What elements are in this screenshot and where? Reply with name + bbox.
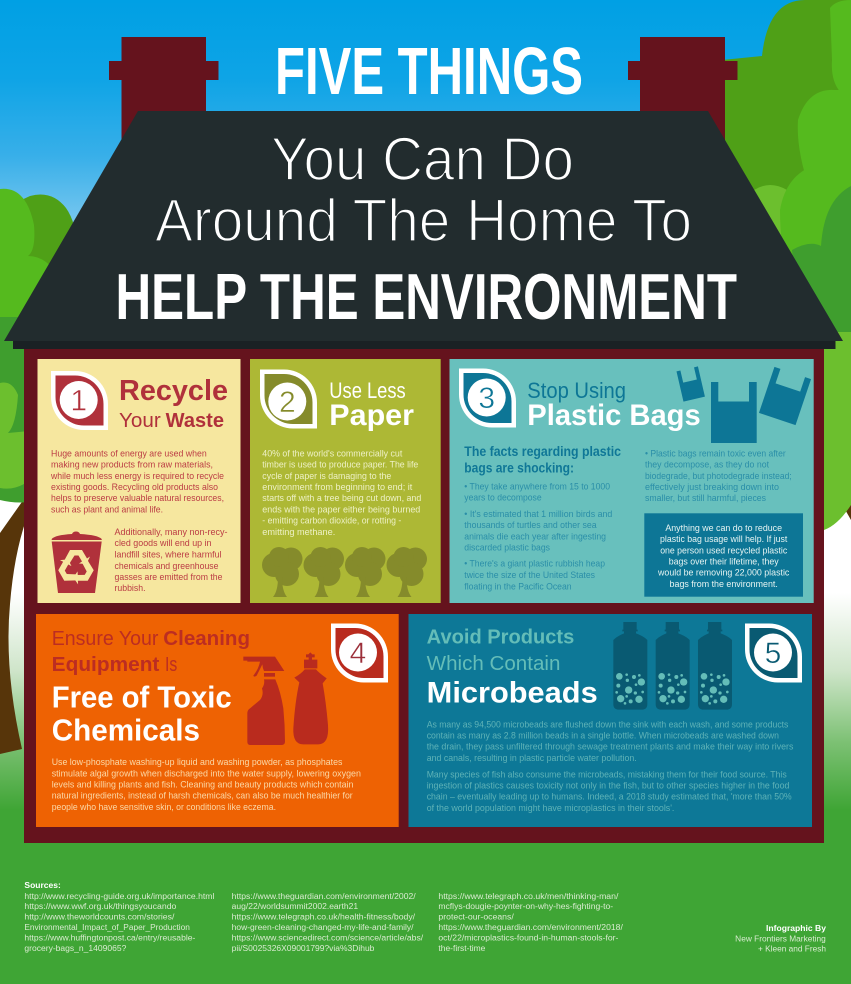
callout: reduce plastic bag usage: would be removing 22,000 plastic [657, 568, 790, 579]
heading: use less paper: Use Less [329, 378, 406, 403]
sources column 2: https://www.telegraph.co.uk/health-fitness/body/ [232, 912, 416, 922]
callout: reduce plastic bag usage: one person used recycled plastic [660, 545, 787, 556]
heading: avoid products which contain microbeads: Which Contain [427, 653, 560, 675]
sources column 2: aug/22/worldsummit2002.earth21 [232, 902, 358, 911]
heading: recycle your waste: Your [119, 410, 161, 432]
text: cleaning body: people who have sensitive skin, or conditions like eczema. [52, 802, 276, 813]
icon: badge 1: 1 [70, 384, 87, 418]
heading: avoid products which contain microbeads [427, 626, 598, 710]
callout: reduce plastic bag usage [644, 513, 803, 597]
text: recycle intro: making new products from raw materials, [51, 460, 213, 470]
text: paper body: timber is used to produce paper. The life [262, 460, 418, 470]
background: lawn fading to green [0, 260, 851, 984]
icon: spray bottle and detergent bottle [243, 652, 328, 745]
icon: badge 2 [260, 370, 317, 428]
sources column 2: pii/S0025326X09001799?via%3Dihub [232, 944, 375, 953]
title: You Can Do [271, 125, 574, 193]
sources column 3: the-first-time [438, 944, 485, 953]
text: facts left column: years to decompose [464, 492, 542, 504]
text: cleaning body: Use low-phosphate washing-up liquid and washing powder, as phosphates [52, 757, 343, 768]
heading: avoid products which contain microbeads: Avoid Products [427, 626, 574, 648]
panel 2: paper [250, 359, 441, 603]
text: landfill note: chemicals and greenhouse [114, 561, 218, 572]
icon: plastic bags [676, 366, 811, 443]
text: landfill note: rubbish. [114, 583, 146, 594]
text: paper body: starts off with a tree being cut down, and [262, 493, 421, 504]
text: recycle intro: such as plant and animal life. [51, 504, 163, 516]
text: cleaning body: stimulate algal growth when discharged into the water supply, lowering oxygen [52, 768, 361, 779]
text: microbeads body: chain – eventually leading up to humans. Indeed, a 2018 study estimated that, 'more than 50% [427, 792, 792, 803]
sources column 1: https://www.huffingtonpost.ca/entry/reusable- [24, 934, 196, 942]
heading: use less paper [329, 378, 414, 432]
text: cleaning body: levels and killing plants and fish. Cleaning and beauty products which contain [52, 779, 353, 790]
text: landfill note: gasses are emitted from the [114, 572, 222, 583]
text: facts right column: biodegrade, but photodegrade instead; [645, 471, 792, 482]
text: paper body: cycle of paper is damaging to the [262, 471, 391, 482]
sources column 1: grocery-bags_n_1409065? [24, 944, 127, 953]
heading: recycle your waste [119, 375, 228, 432]
background: sky [0, 0, 851, 260]
credit: infographic by: Infographic By [766, 923, 826, 933]
panel 1: recycle [38, 359, 240, 603]
text: cleaning body: natural ingredients, instead of harsh chemicals, can also be much healthier for [52, 791, 353, 802]
heading: avoid products which contain microbeads: Microbeads [427, 677, 598, 710]
text: landfill note: cled goods will end up in [114, 538, 212, 549]
text: cleaning body [52, 757, 361, 813]
sources column 1: http://www.recycling-guide.org.uk/importance.html [24, 892, 215, 901]
sources column 3 [438, 892, 624, 953]
text: facts right column: • Plastic bags remain toxic even after [645, 448, 786, 460]
text: paper body: environment from beginning to end; it [262, 482, 413, 493]
heading: use less paper: Paper [329, 399, 414, 432]
callout: reduce plastic bag usage: Anything we can do to reduce [665, 523, 782, 534]
heading: stop using plastic bags: Stop Using [527, 378, 626, 403]
left tree [0, 189, 78, 754]
icon: recycling bin [52, 532, 102, 593]
icon: badge 3: 3 [478, 382, 495, 415]
left chimney [109, 37, 218, 147]
sources column 3: mcflys-dougie-poynter-on-why-hes-fighting-to- [438, 902, 614, 911]
roof [4, 111, 843, 349]
icon: badge 5: 5 [765, 637, 781, 670]
icon: badge 3 [459, 368, 516, 428]
callout: reduce plastic bag usage: bags over their lifetime, they [669, 557, 779, 568]
text: recycle intro: existing goods. Recycling old products also [51, 482, 218, 493]
heading: ensure your cleaning equipment is free of toxic chemicals: Ensure Your [52, 627, 159, 650]
text: landfill note: Additionally, many non-recy- [114, 527, 228, 538]
sources [24, 880, 624, 953]
text: facts heading [464, 443, 621, 476]
text: microbeads body: ingestion of plastics causes toxicity not only in the fish, but to other species higher in the food [427, 781, 789, 792]
icon: four trees [262, 547, 427, 597]
text: facts left column: thousands of turtles and other sea [464, 520, 597, 531]
text: paper body: - emitting carbon dioxide, or rotting - [262, 516, 401, 526]
text: facts left column: • They take anywhere from 15 to 1000 [464, 482, 610, 492]
credit: infographic by [735, 923, 826, 954]
heading: ensure your cleaning equipment is free of toxic chemicals: Equipment [52, 653, 160, 676]
right tree [722, 0, 851, 530]
sources column 2 [232, 892, 424, 953]
heading: stop using plastic bags [527, 378, 701, 432]
icon: badge 1 [51, 371, 108, 430]
heading: ensure your cleaning equipment is free of toxic chemicals: Free of Toxic [52, 680, 232, 715]
text: facts left column: discarded plastic bags [464, 543, 550, 554]
text: microbeads body: Many species of fish also consume the microbeads, mistaking them for their food source. This [427, 769, 787, 780]
text: facts left column [464, 482, 612, 592]
icon: badge 4: 4 [350, 637, 366, 670]
text: microbeads body: and canals, resulting in plastic particle water pollution. [427, 753, 637, 764]
text: facts right column: they decompose, as they do not [645, 460, 769, 470]
panel 4: cleaning chemicals [36, 614, 399, 827]
text: facts left column: twice the size of the United States [464, 570, 595, 581]
sources: Sources: [24, 880, 61, 890]
text: microbeads body: contain as many as 2.8 million beads in a single bottle. When microbeads are washed down [427, 730, 779, 741]
icon: bottles with microbeads [613, 622, 732, 710]
sources column 2: how-green-cleaning-changed-my-life-and-family/ [232, 923, 414, 932]
panel 5: microbeads [408, 614, 812, 827]
house wall [24, 345, 824, 843]
sources column 2: https://www.sciencedirect.com/science/article/abs/ [232, 934, 424, 942]
sources column 1: Environmental_Impact_of_Paper_Production [24, 923, 190, 932]
heading: ensure your cleaning equipment is free of toxic chemicals: Cleaning [163, 627, 250, 650]
text: facts left column: animals die each year after ingesting [464, 531, 606, 542]
text: landfill note: landfill sites, where harmful [114, 550, 222, 560]
text: paper body: 40% of the world's commercially cut [262, 448, 403, 460]
sources column 2: https://www.theguardian.com/environment/2002/ [232, 892, 417, 901]
text: landfill note [114, 527, 228, 594]
panel 3: plastic bags [450, 359, 814, 603]
credit: infographic by: + Kleen and Fresh [758, 945, 826, 954]
text: facts heading: The facts regarding plastic [464, 443, 621, 459]
text: microbeads body: As many as 94,500 microbeads are flushed down the sink with each wash, and some products [427, 719, 789, 730]
text: recycle intro: while much less energy is required to recycle [50, 471, 224, 482]
text: microbeads body: of the world population might have microplastics in their stools'. [427, 803, 674, 814]
sources column 1 [24, 892, 215, 953]
text: facts heading: bags are shocking: [464, 460, 574, 476]
icon: badge 2: 2 [279, 386, 296, 419]
heading: stop using plastic bags: Plastic Bags [527, 399, 701, 432]
text: recycle intro: helps to preserve valuable natural resources, [51, 493, 224, 504]
text: facts right column: smaller, but still harmful, pieces [645, 493, 766, 504]
right chimney [628, 37, 738, 147]
sources column 1: https://www.wwf.org.uk/thingsyoucando [24, 902, 177, 911]
text: facts left column: • It's estimated that 1 million birds and [464, 509, 612, 520]
heading: recycle your waste: Waste [166, 410, 224, 432]
sources column 3: https://www.theguardian.com/environment/2018/ [438, 923, 624, 932]
text: recycle intro: Huge amounts of energy are used when [51, 448, 207, 460]
text: facts left column: • There's a giant plastic rubbish heap [464, 559, 605, 570]
heading: recycle your waste: Recycle [119, 375, 228, 407]
heading: ensure your cleaning equipment is free of toxic chemicals: Chemicals [52, 713, 200, 748]
sources column 1: http://www.theworldcounts.com/stories/ [24, 912, 175, 922]
heading: ensure your cleaning equipment is free of toxic chemicals: Is [165, 653, 177, 676]
text: paper body [262, 448, 421, 538]
sources column 3: https://www.telegraph.co.uk/men/thinking-man/ [438, 892, 619, 901]
text: microbeads body [427, 719, 794, 814]
text: paper body: ends with the paper either being burned [262, 504, 420, 516]
text: facts right column: effectively just breaking down into [645, 482, 779, 493]
callout: reduce plastic bag usage: plastic bag usage will help. If just [660, 534, 788, 545]
title: FIVE THINGS [275, 34, 583, 109]
text: paper body: emitting methane. [262, 527, 335, 538]
title: Around The Home To [155, 187, 692, 254]
text: facts left column: floating in the Pacific Ocean [464, 581, 572, 592]
text: recycle intro [50, 448, 224, 516]
text: facts right column [645, 448, 792, 504]
text: microbeads body: the drain, they pass unfiltered through sewage treatment plants and make their way into rivers [427, 742, 794, 753]
heading: ensure your cleaning equipment is free of toxic chemicals [52, 627, 250, 748]
icon: badge 4 [331, 624, 388, 682]
callout: reduce plastic bag usage: bags from the environment. [670, 579, 778, 590]
sources column 3: oct/22/microplastics-found-in-human-stools-for- [438, 934, 619, 942]
icon: badge 5 [745, 624, 802, 682]
sources column 3: protect-our-oceans/ [438, 912, 515, 922]
title [116, 34, 737, 333]
credit: infographic by: New Frontiers Marketing [735, 935, 826, 944]
